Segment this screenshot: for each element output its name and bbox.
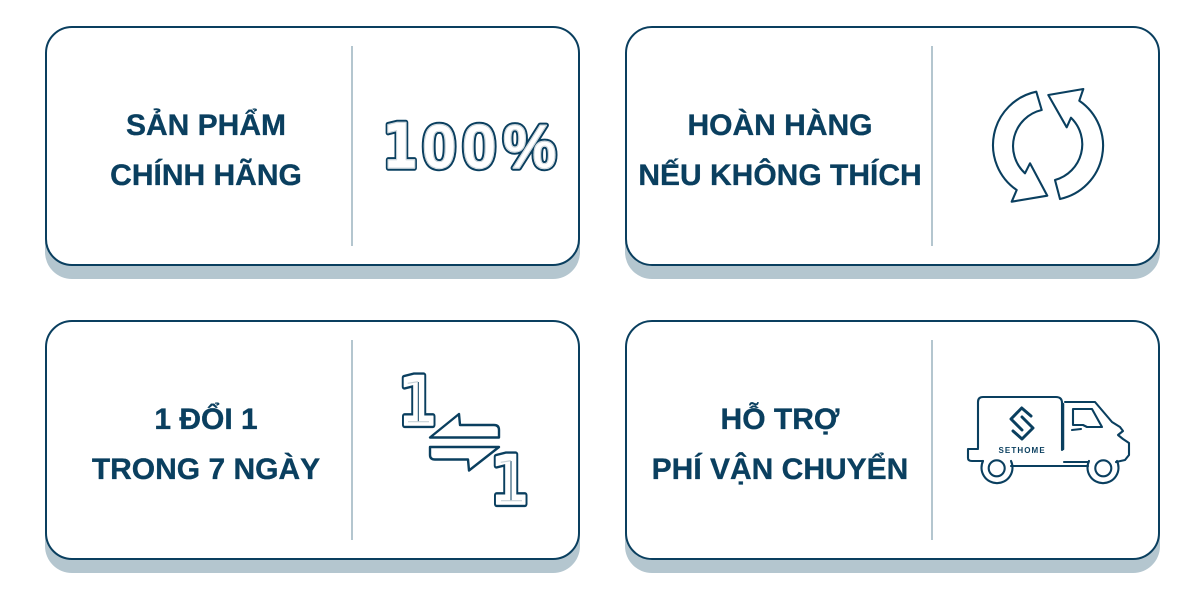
icon: 100 percent: 00: [422, 113, 496, 182]
icon: swap arrows: [398, 362, 529, 520]
panel: shipping support: [625, 321, 1160, 573]
truck logo mark: [1011, 408, 1033, 439]
heading: genuine products: [110, 108, 302, 192]
icon: 100 percent: %: [503, 112, 556, 181]
icon: 100 percent: [382, 111, 556, 183]
icon: 100 percent: 1: [382, 111, 418, 183]
heading: shipping support: [652, 402, 908, 486]
heading: genuine products: CHÍNH HÃNG: [110, 158, 302, 192]
panel: return if not liked: [625, 27, 1160, 279]
panel: one for one exchange: [45, 321, 580, 573]
heading: one for one exchange: 1 ĐỔI 1: [154, 402, 258, 436]
panel: genuine products: [45, 27, 580, 279]
icon: swap arrows: 1: [490, 441, 529, 520]
icon: 100 percent: 1: [382, 111, 418, 183]
heading: shipping support: PHÍ VẬN CHUYỂN: [652, 452, 908, 486]
icon: swap arrows: 1: [490, 441, 529, 520]
heading: return if not liked: NẾU KHÔNG THÍCH: [638, 158, 922, 192]
icon: 100 percent: 00: [422, 113, 496, 182]
icon: swap arrows: 1: [398, 362, 437, 441]
icon: delivery truck: [968, 397, 1129, 483]
icon: circular arrows: [993, 89, 1103, 202]
icon: 100 percent: 00: [422, 113, 496, 182]
icon: swap arrows: 1: [398, 362, 437, 441]
icon: 100 percent: %: [503, 112, 556, 181]
heading: one for one exchange: [92, 402, 320, 486]
heading: return if not liked: [638, 108, 922, 192]
heading: shipping support: HỖ TRỢ: [721, 402, 840, 436]
truck logo wordmark: SETHOME: [998, 446, 1046, 455]
heading: genuine products: SẢN PHẨM: [126, 108, 286, 142]
icon: 100 percent: %: [503, 112, 556, 181]
icon: 100 percent: 1: [382, 111, 418, 183]
heading: return if not liked: HOÀN HÀNG: [688, 108, 872, 142]
heading: one for one exchange: TRONG 7 NGÀY: [92, 452, 320, 486]
